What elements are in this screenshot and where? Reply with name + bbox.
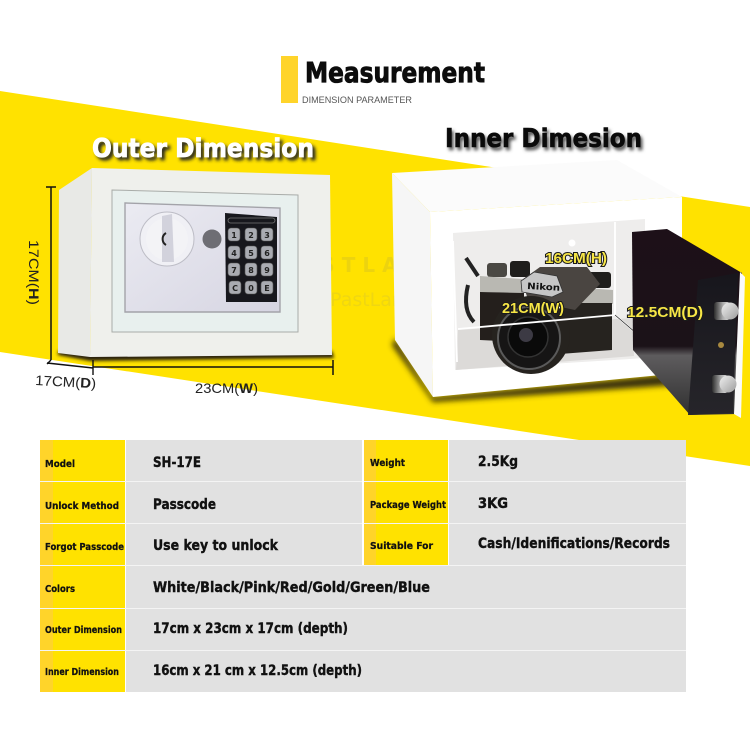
- inner depth label: 12.5CM(D): [627, 305, 703, 321]
- inner dimension row: [45, 663, 362, 679]
- keypad: 5: [248, 249, 254, 258]
- door face: [688, 273, 738, 415]
- yellow diagonal band: [0, 91, 750, 466]
- keypad: 3: [264, 231, 270, 240]
- colors row: [45, 580, 430, 596]
- foam floor: [456, 318, 634, 370]
- camera: [466, 258, 613, 374]
- camera right leather: [560, 303, 612, 354]
- depth dimension line: [47, 360, 93, 375]
- keypad: E: [264, 284, 270, 293]
- safe left side: [392, 173, 433, 397]
- camera left dials: [487, 263, 507, 277]
- camera strap: [466, 258, 478, 322]
- heading title: Measurement: [305, 56, 485, 89]
- keypad: [225, 213, 277, 302]
- door frame: [112, 190, 298, 332]
- width dimension line: [93, 360, 333, 375]
- mounting hole: [568, 240, 576, 246]
- keypad: 9: [264, 266, 270, 275]
- specification table: [40, 440, 686, 692]
- inner safe: [392, 160, 745, 418]
- weight row: [370, 454, 518, 470]
- keypad: 1: [231, 231, 237, 240]
- safe side: [58, 168, 92, 357]
- camera right dial: [585, 272, 611, 288]
- outer dimension row: [45, 621, 348, 637]
- silver panel: [125, 203, 280, 312]
- width label: 23CM(W): [195, 380, 258, 396]
- inner dimension row: Inner Dimension: [45, 667, 119, 678]
- camera left leather: [480, 292, 524, 342]
- depth label: 17CM(D): [35, 372, 97, 391]
- forgot passcode row: [45, 538, 279, 554]
- lens: [492, 296, 570, 374]
- colors row: White/Black/Pink/Red/Gold/Green/Blue: [153, 580, 430, 596]
- keypad: 4: [231, 249, 237, 258]
- label column left: [40, 440, 125, 692]
- unlock method row: Unlock Method: [45, 501, 119, 512]
- colors row: Colors: [45, 584, 75, 595]
- unlock method row: [45, 497, 216, 513]
- inner width label: 21CM(W): [502, 301, 564, 317]
- keypad: C: [232, 284, 238, 293]
- package weight row: Package Weight: [370, 500, 446, 511]
- suitable for row: Suitable For: [370, 541, 433, 552]
- weight row: 2.5Kg: [478, 454, 518, 470]
- safe shadow: [58, 351, 334, 361]
- unlock method row: Passcode: [153, 497, 216, 513]
- inner dimension row: 16cm x 21 cm x 12.5cm (depth): [153, 663, 362, 679]
- outer dimension title: Outer Dimension: [95, 137, 317, 167]
- safe shadow: [392, 338, 690, 402]
- dial: [140, 212, 194, 266]
- keyhole: [718, 342, 724, 348]
- watermark: http://PastLanes.com: [272, 289, 472, 311]
- safe opening: [453, 219, 645, 370]
- open door: [632, 229, 745, 418]
- keypad: 7: [231, 266, 237, 275]
- safe top: [392, 160, 682, 212]
- height dimension line: [46, 187, 56, 360]
- model row: SH-17E: [153, 455, 201, 471]
- keypad: 8: [248, 266, 254, 275]
- outer dimension title: Outer Dimension: [92, 134, 314, 164]
- height label: 17CM( H ): [26, 240, 42, 305]
- inner dimension title: Inner Dimesion: [447, 127, 644, 157]
- heading: measurement: [281, 56, 485, 106]
- top knob: [714, 302, 738, 320]
- suitable for row: Cash/Idenifications/Records: [478, 536, 670, 552]
- safe front: [430, 197, 682, 397]
- model row: [45, 455, 201, 471]
- nameplate: [521, 272, 563, 297]
- forgot passcode row: Forgot Passcode: [45, 542, 124, 553]
- camera right silver plate: [570, 287, 613, 304]
- heading subtitle: DIMENSION PARAMETER: [302, 95, 412, 106]
- suitable for row: [370, 536, 670, 552]
- outer dimension row: 17cm x 23cm x 17cm (depth): [153, 621, 348, 637]
- outer dimension row: Outer Dimension: [45, 625, 122, 636]
- inner dimension title: Inner Dimesion: [445, 124, 642, 154]
- indicator button: [202, 230, 222, 248]
- safe front: [90, 168, 332, 357]
- keypad: 0: [248, 284, 254, 293]
- package weight row: 3KG: [478, 496, 508, 512]
- camera: Nikon: [527, 282, 560, 294]
- keypad: 2: [248, 231, 254, 240]
- forgot passcode row: Use key to unlock: [153, 538, 279, 554]
- prism housing: [522, 267, 600, 310]
- dimension lines: [453, 222, 636, 362]
- accent strips: [40, 440, 376, 692]
- row backgrounds: [126, 440, 686, 692]
- keypad: 6: [264, 249, 270, 258]
- outer safe: [58, 168, 334, 361]
- heading accent bar: [281, 56, 298, 103]
- bottom knob: [712, 375, 736, 393]
- inner height label: 16CM(H): [545, 251, 607, 267]
- model row: Model: [45, 459, 75, 470]
- camera left silver plate: [480, 276, 522, 293]
- label column right: [364, 440, 448, 565]
- door edge: [734, 272, 745, 418]
- package weight row: [370, 496, 508, 512]
- watermark: [272, 253, 472, 311]
- watermark: PASTLANES: [278, 253, 470, 277]
- weight row: Weight: [370, 458, 405, 469]
